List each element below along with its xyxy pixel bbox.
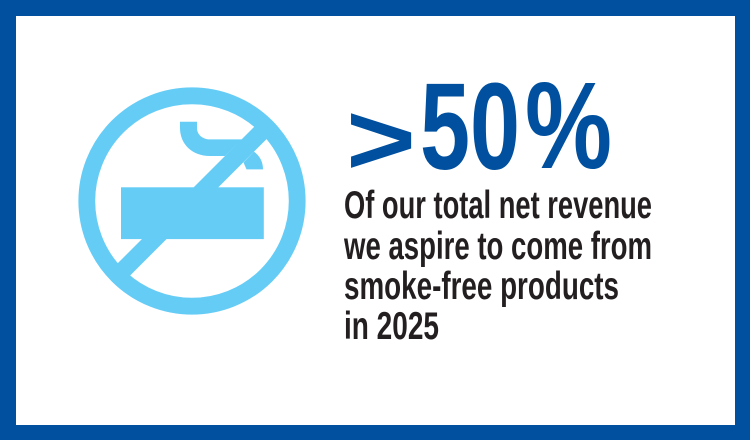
diagonal bar [122,131,262,271]
description text [343,184,652,348]
headline: >50% [346,58,612,196]
percent sign: % [525,58,612,195]
cigarette [121,187,264,239]
number 50: 50 [420,59,520,196]
greater-than sign: > [346,84,416,196]
prohibition circle [87,96,297,306]
icon: no smoking [87,96,297,306]
line 3: smoke-free products [344,265,619,308]
smoke tail [244,152,263,169]
line 4: in 2025 [344,305,439,348]
smoke curl [180,122,242,156]
